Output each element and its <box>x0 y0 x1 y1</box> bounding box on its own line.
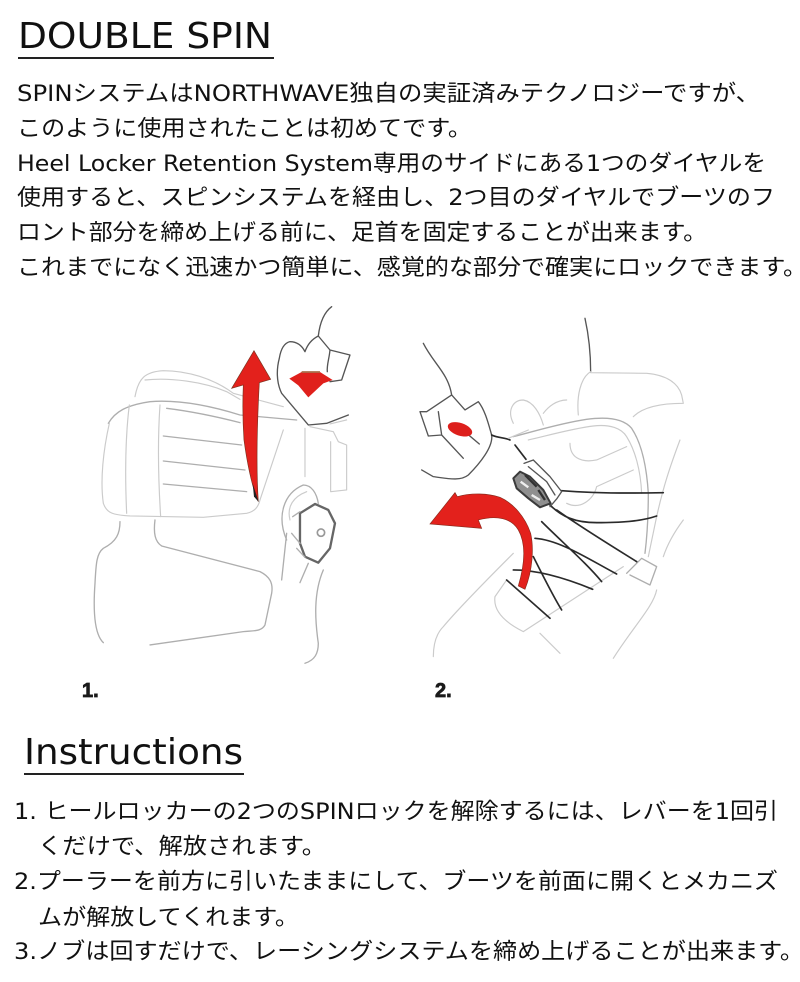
hand <box>277 307 350 425</box>
text block: description: SPINシステムはNORTHWAVE独自の実証済みテクノロジーですが、 <box>17 81 760 107</box>
hand <box>420 343 528 479</box>
red arrow up <box>232 351 271 502</box>
illustration 1: pulling the lever upward <box>94 307 350 663</box>
title: DOUBLE SPIN: DOUBLE SPIN <box>18 16 272 57</box>
red arrow left <box>430 493 532 589</box>
text block: description: このように使用されたことは初めてです。 <box>17 116 472 142</box>
label: 2.: 2. <box>435 680 452 702</box>
list: instructions: ムが解放してくれます。 <box>38 905 299 931</box>
list: instructions: 1. ヒールロッカーの2つのSPINロックを解除するには、レバーを1回引 <box>14 799 778 825</box>
text block: description: これまでになく迅速かつ簡単に、感覚的な部分で確実にロックできます。 <box>17 255 800 281</box>
label: 1.: 1. <box>82 680 99 702</box>
red lever <box>289 372 333 397</box>
laces <box>507 491 663 618</box>
boot outline <box>433 318 683 658</box>
dial <box>513 445 562 507</box>
list: instructions: 2.プーラーを前方に引いたままにして、ブーツを前面に開くとメカニズ <box>14 869 778 895</box>
text block: description <box>17 81 800 281</box>
red lever <box>446 419 474 439</box>
text block: description: ロント部分を締め上げる前に、足首を固定することが出来ます。 <box>17 220 707 246</box>
heading: Instructions: Instructions <box>24 732 243 773</box>
boot outline <box>94 371 347 645</box>
dial <box>282 485 335 663</box>
list: instructions: 3.ノブは回すだけで、レーシングシステムを締め上げることが出来ます。 <box>14 939 800 965</box>
text block: description: Heel Locker Retention System専用のサイドにある1つのダイヤルを <box>17 151 766 177</box>
list: instructions: くだけで、解放されます。 <box>38 834 326 860</box>
text block: description: 使用すると、スピンシステムを経由し、2つ目のダイヤルでブーツのフ <box>17 185 775 211</box>
list: instructions <box>14 799 800 965</box>
illustration 2: opening the boot forward <box>420 318 683 658</box>
